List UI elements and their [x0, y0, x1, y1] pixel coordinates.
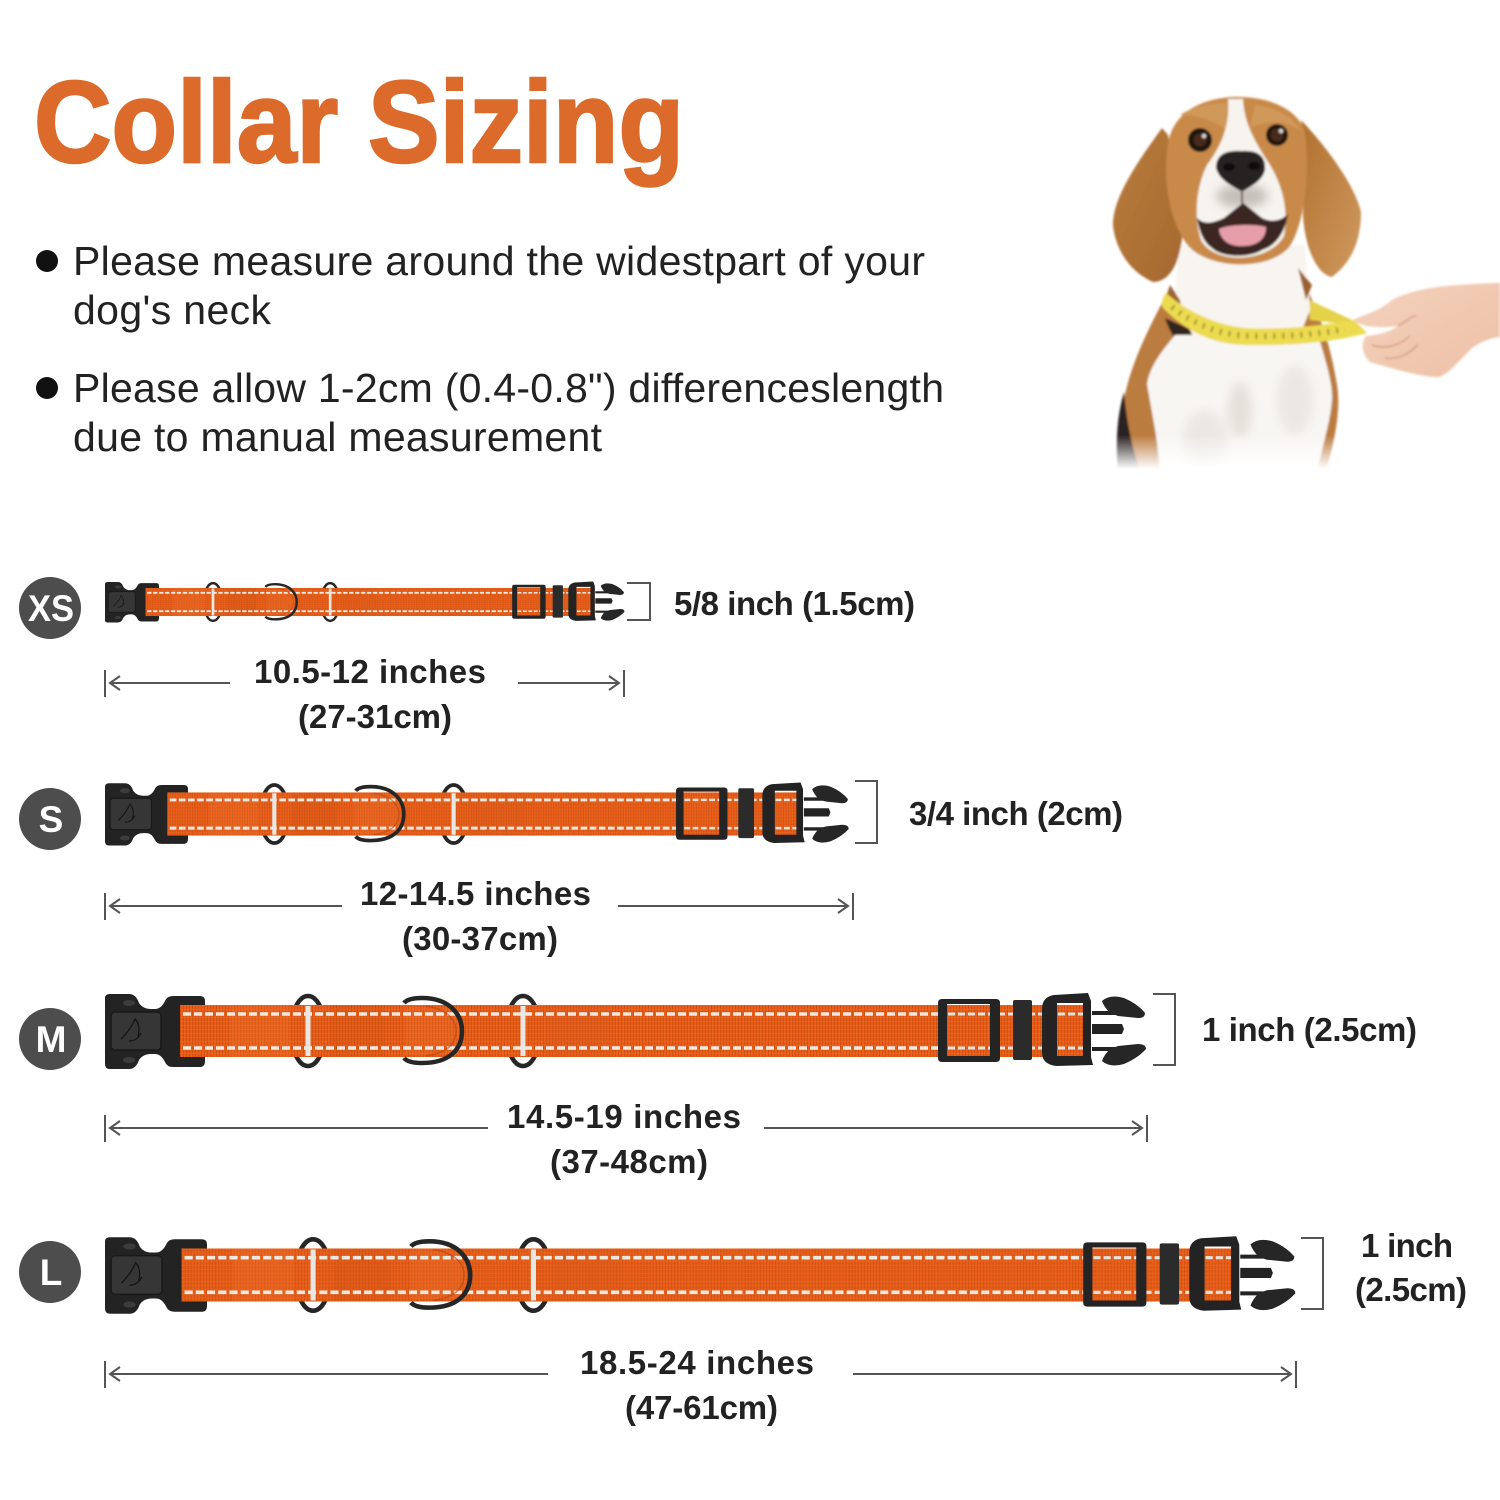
length arrow M: [105, 1115, 1147, 1142]
length label L: (47-61cm): [625, 1389, 778, 1426]
size badge S: [19, 788, 81, 850]
width bracket L: [1301, 1238, 1323, 1309]
instruction line 4: due to manual measurement: [73, 414, 603, 460]
text block: measuring instructions: [36, 238, 944, 460]
length label S: 12-14.5 inches: [360, 875, 591, 912]
width label L: [1355, 1227, 1467, 1308]
illustration: beagle being measured with tape: [1090, 97, 1500, 483]
title: Collar Sizing: [34, 57, 684, 187]
size badge L: [19, 1241, 81, 1303]
length label XS: [254, 653, 486, 735]
collar S: [105, 782, 849, 846]
length label XS: (27-31cm): [298, 698, 452, 735]
width label L: 1 inch: [1361, 1227, 1453, 1264]
length label XS: 10.5-12 inches: [254, 653, 486, 690]
width label XS: 5/8 inch (1.5cm): [674, 585, 915, 622]
length label L: 18.5-24 inches: [580, 1344, 814, 1381]
length label M: 14.5-19 inches: [507, 1098, 741, 1135]
size badge M: [19, 1008, 81, 1070]
width bracket S: [855, 781, 877, 843]
bullet 1: [36, 250, 58, 272]
size badge XS: XS: [28, 588, 74, 629]
instruction line 1: Please measure around the widestpart of your: [73, 238, 925, 284]
width bracket XS: [627, 583, 650, 620]
length label M: (37-48cm): [550, 1143, 708, 1180]
bullet 2: [36, 377, 58, 399]
size badge L: L: [40, 1252, 62, 1293]
width label S: 3/4 inch (2cm): [909, 795, 1123, 832]
length label S: [360, 875, 591, 957]
collar XS: [105, 581, 624, 623]
length label M: [507, 1098, 741, 1180]
length label L: [580, 1344, 814, 1426]
length arrow XS: [105, 670, 624, 697]
instruction line 2: dog's neck: [73, 287, 272, 333]
width label M: 1 inch (2.5cm): [1202, 1011, 1417, 1048]
width label L: (2.5cm): [1355, 1271, 1467, 1308]
collar M: [105, 993, 1146, 1069]
size badge S: S: [39, 799, 63, 840]
instruction line 3: Please allow 1-2cm (0.4-0.8") differenceslength: [73, 365, 944, 411]
collar L: [105, 1236, 1295, 1314]
size badge M: M: [36, 1019, 66, 1060]
size badge XS: [19, 577, 81, 639]
length label S: (30-37cm): [402, 920, 558, 957]
length arrow S: [105, 893, 853, 920]
length arrow L: [105, 1361, 1296, 1388]
width bracket M: [1153, 994, 1175, 1065]
